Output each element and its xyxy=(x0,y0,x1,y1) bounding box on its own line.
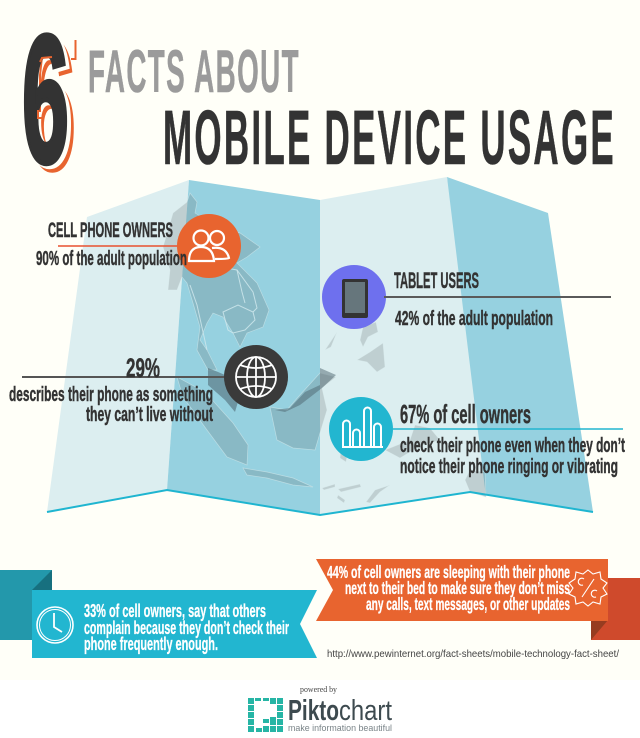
map panel: far right blue fold xyxy=(447,177,593,512)
icon: clock xyxy=(37,607,73,643)
callout: 29 percent: they can’t live without xyxy=(86,404,213,426)
callout: tablet users xyxy=(322,265,611,330)
land: Philippines xyxy=(360,322,378,347)
callout: 29 percent xyxy=(9,345,288,426)
callout: 67 percent of cell owners xyxy=(329,397,625,478)
callout: 67 percent of cell owners: 67% of cell owners xyxy=(400,399,531,429)
land: Borneo xyxy=(270,373,336,450)
powered by: powered by xyxy=(300,685,337,694)
title: big six numeral: 6 xyxy=(24,0,73,204)
map panel: centre-right light fold xyxy=(320,177,486,515)
callout: 29 percent: describes their phone as something xyxy=(9,384,213,406)
logo wordmark xyxy=(288,695,392,734)
callout: cell phone owners: 90% of the adult population xyxy=(36,248,187,270)
title: big six numeral: 6 xyxy=(22,0,69,201)
land: Sulawesi xyxy=(385,425,440,458)
land: Indochina xyxy=(163,193,269,370)
callout: tablet users: TABLET USERS xyxy=(394,268,479,293)
land: Papua tip xyxy=(465,470,486,497)
map land: dark peninsula overlap xyxy=(208,368,240,412)
map panel: left light fold xyxy=(47,180,189,512)
map panel: centre-left blue fold xyxy=(167,180,320,515)
text: FACTS ABOUT xyxy=(88,38,300,105)
ribbon: 44 percent xyxy=(316,559,640,640)
ribbon: 33 percent: phone frequently enough. xyxy=(84,633,218,654)
land: lesser islands xyxy=(322,484,335,490)
icon: percent badge xyxy=(569,570,607,606)
callout: cell phone owners xyxy=(36,214,241,278)
logo wordmark: chart xyxy=(339,695,392,727)
logo wordmark: Pikto xyxy=(288,695,339,727)
source url: http://www.pewinternet.org/fact-sheets/mobile-technology-fact-sheet/ xyxy=(327,648,619,660)
logo wordmark: make information beautiful xyxy=(288,723,392,734)
ribbon: 33 percent: complain because they don’t check their xyxy=(84,617,289,638)
text: 6 xyxy=(27,4,76,208)
map land: country borders xyxy=(190,268,257,350)
callout: 29 percent: 29% xyxy=(126,353,160,383)
icon: bar chart xyxy=(329,397,393,461)
ribbon: 33 percent: 33% of cell owners, say that others xyxy=(84,600,266,621)
icon: people xyxy=(177,214,241,278)
map land: dark Borneo band xyxy=(275,368,336,412)
land: Java xyxy=(243,468,313,487)
icon: globe xyxy=(224,345,288,409)
folded map xyxy=(47,177,593,515)
icon: tablet xyxy=(322,265,386,329)
map land: southeast Asia xyxy=(163,193,486,503)
ribbon: 33 percent xyxy=(0,570,317,658)
callout: cell phone owners: CELL PHONE OWNERS xyxy=(48,219,173,242)
title: big six numeral xyxy=(22,0,76,208)
land: Sumatra xyxy=(177,377,248,465)
logo mark xyxy=(248,698,283,732)
map bottom edge xyxy=(47,490,593,515)
